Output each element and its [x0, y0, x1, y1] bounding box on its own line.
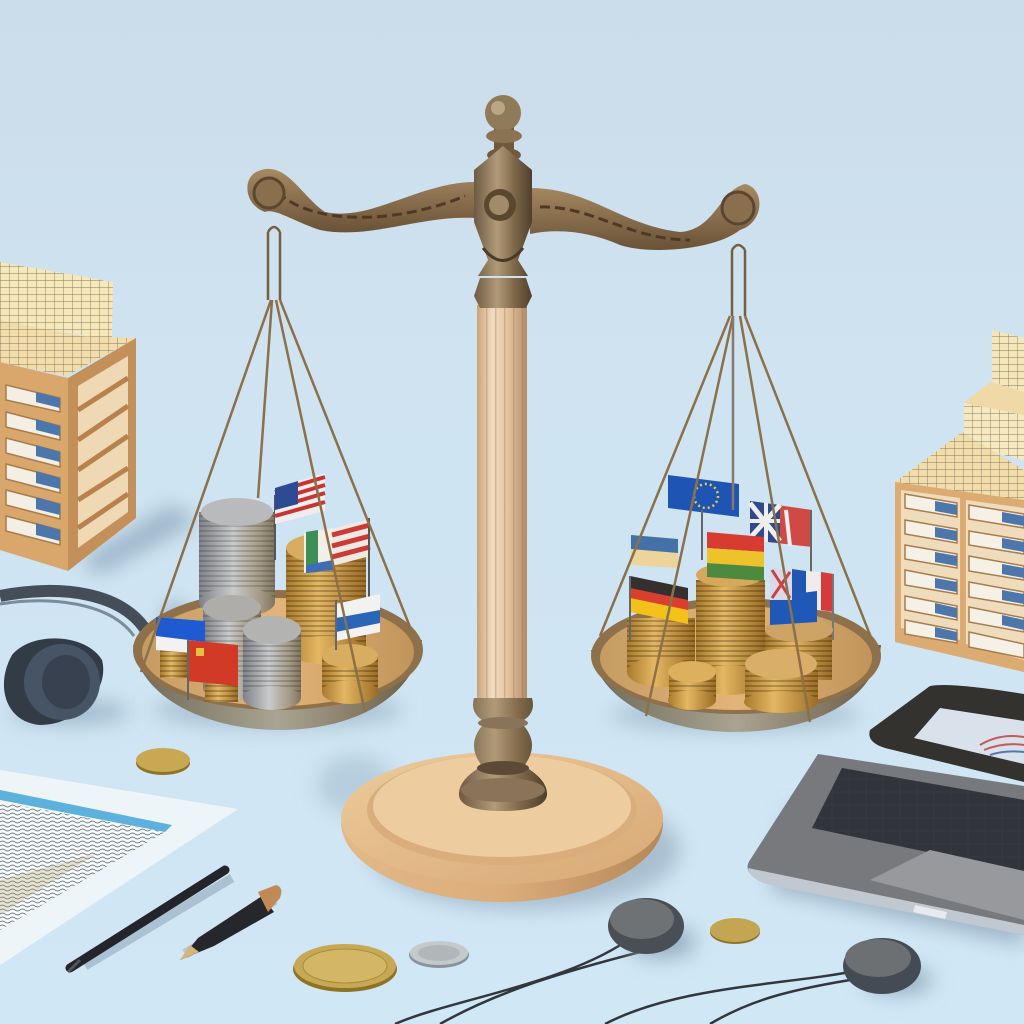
right organizer shelf [895, 330, 1024, 672]
left organizer shelf [0, 262, 200, 575]
cords [600, 245, 872, 722]
earbuds and cables [395, 898, 932, 1024]
flag: EU [668, 475, 739, 560]
gold coin large [293, 944, 397, 992]
flag: tricolor [792, 569, 834, 640]
laptop body [748, 754, 1024, 935]
scale base [317, 752, 680, 910]
top of post and beam [247, 95, 759, 308]
flag: USA [275, 473, 325, 560]
flags right front [630, 532, 817, 640]
pens [68, 870, 281, 972]
flag: white and blue [336, 594, 380, 650]
flag: blue white [156, 617, 205, 654]
flag: stripes [332, 518, 370, 600]
cords [141, 227, 412, 712]
coin stacks [160, 498, 378, 710]
flag: sand and blue [631, 535, 678, 568]
document with data table [0, 770, 238, 965]
flags right back [631, 475, 834, 640]
left pan [133, 227, 423, 730]
flags left [156, 473, 380, 700]
coin stacks [627, 563, 833, 713]
loose coin near paper [136, 748, 190, 775]
finial [485, 95, 522, 162]
flag: Italy-style [304, 528, 333, 573]
flag: blue white small [770, 567, 817, 625]
pan dish [591, 598, 881, 732]
coins on the desk [293, 918, 760, 992]
flag: red yellow green [707, 532, 764, 581]
flag: red [187, 640, 238, 700]
post collar [459, 698, 547, 811]
laptop lid [869, 685, 1024, 782]
flag: UK style [750, 501, 812, 575]
silver coin [409, 941, 469, 968]
headphones [0, 591, 190, 725]
center block [474, 146, 532, 276]
laptop [748, 685, 1024, 945]
pan dish [133, 590, 423, 730]
right pan [591, 245, 881, 732]
flag: Germany [630, 576, 688, 640]
gold coin small [710, 918, 760, 944]
scale post [459, 305, 547, 811]
